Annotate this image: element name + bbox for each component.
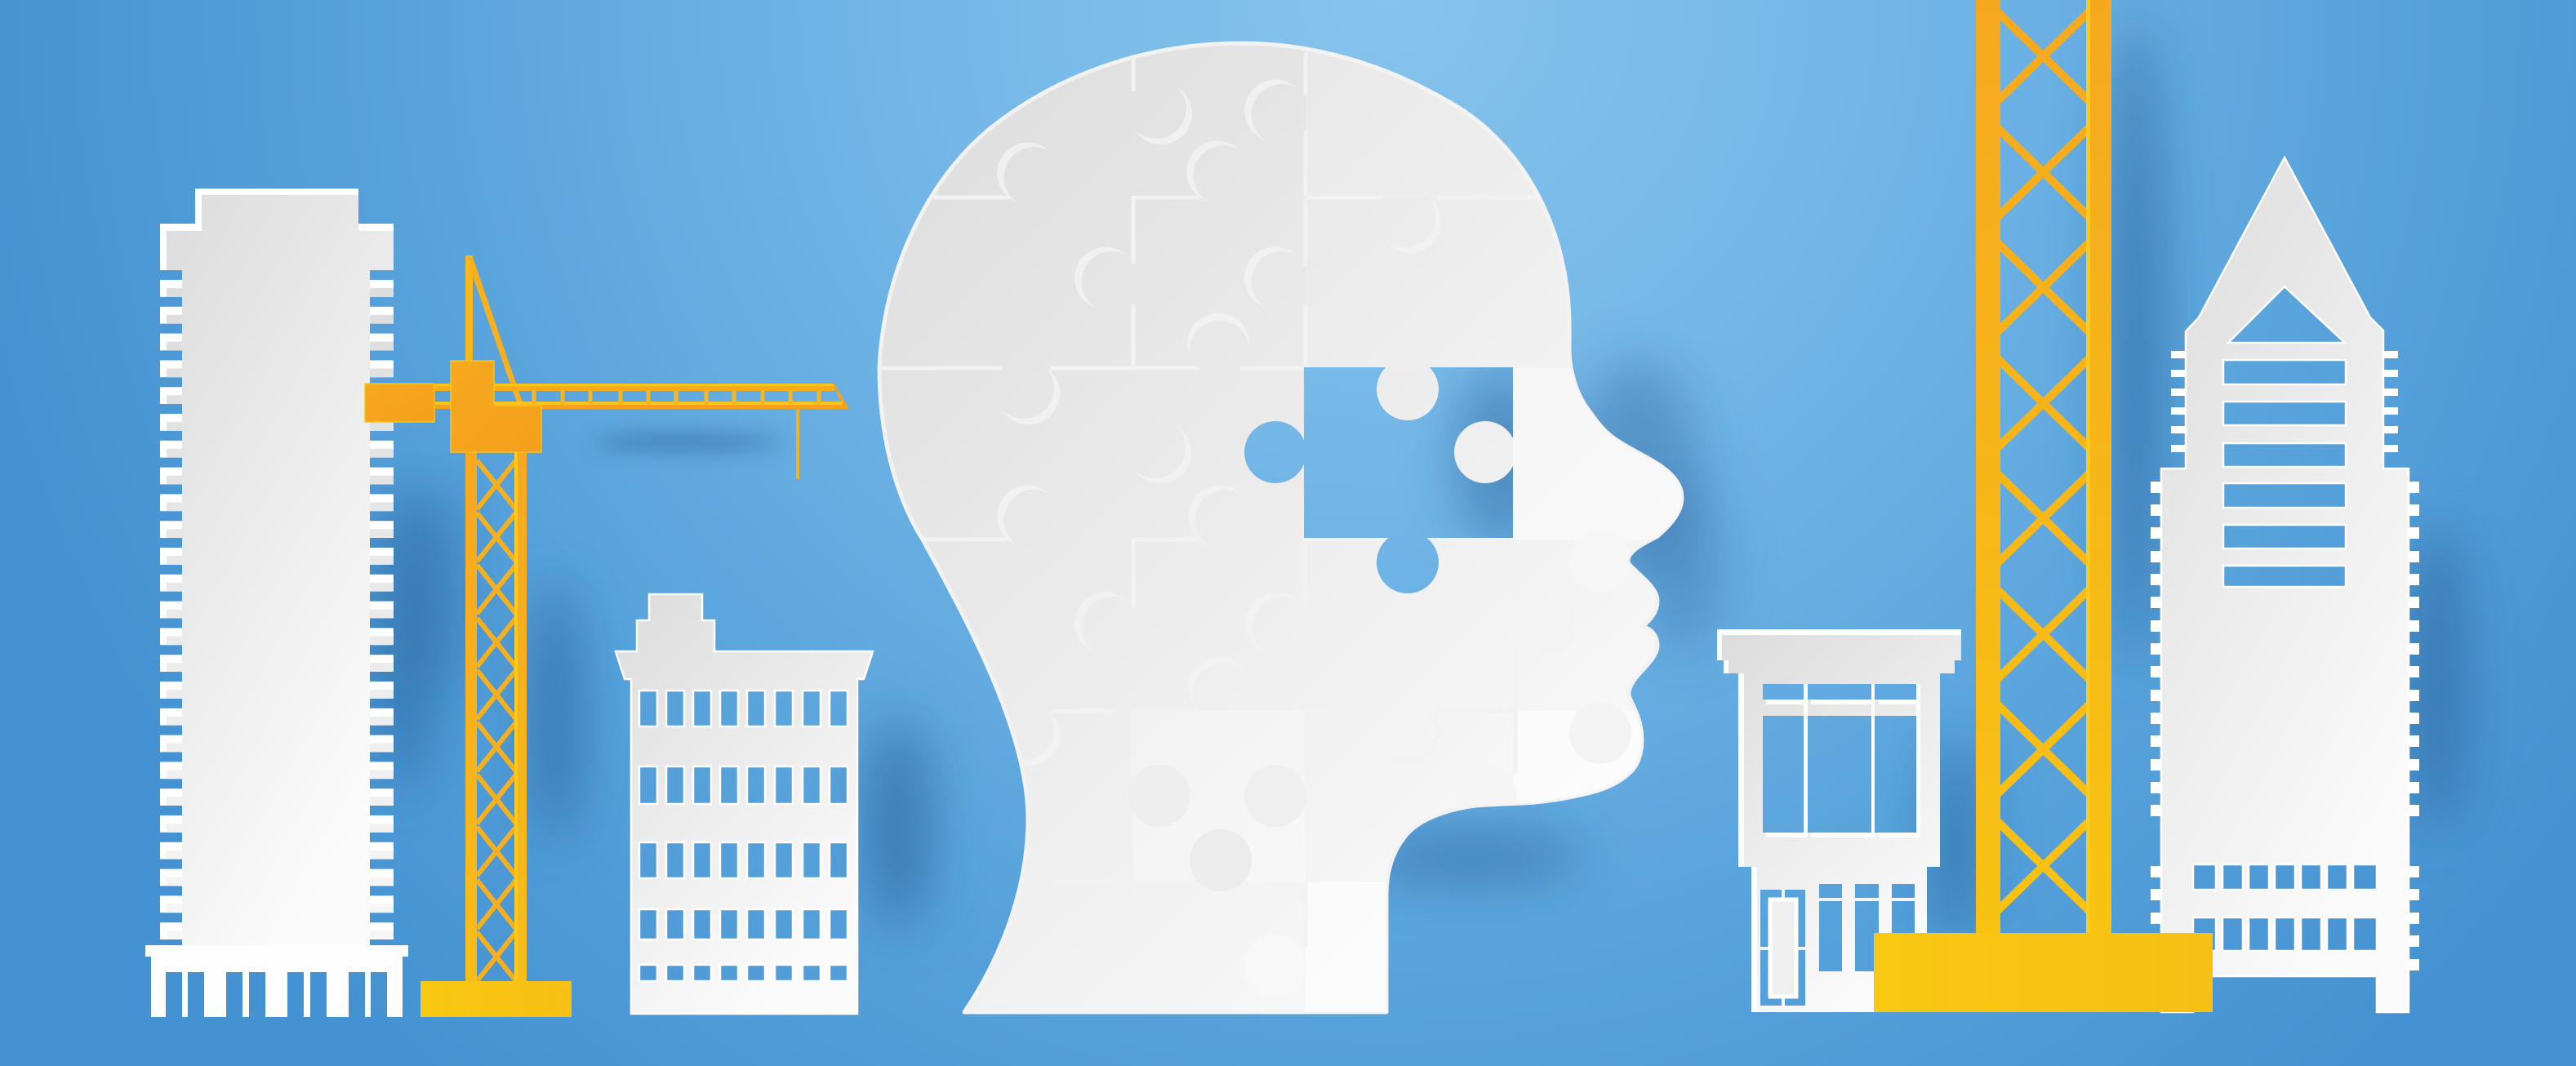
small building with door <box>1717 629 1961 1012</box>
head shape <box>879 43 1682 1012</box>
large crane legs <box>1976 0 2111 933</box>
large crane lattice <box>1996 11 2090 912</box>
lower balconies <box>2151 482 2419 971</box>
tower body <box>167 195 394 945</box>
crane mast lattice <box>477 460 516 981</box>
crane leg highlight <box>514 452 518 981</box>
crane stay cable <box>469 257 523 402</box>
door <box>1770 899 1796 997</box>
building rim <box>1717 629 1961 1012</box>
tower balcony shade right <box>370 270 394 945</box>
puzzle tabs filled <box>1190 712 1631 882</box>
crane hook line <box>796 409 799 479</box>
crane base <box>420 981 572 1017</box>
tower base with columns <box>145 945 408 1017</box>
crane cab <box>451 361 541 452</box>
tower balcony shade left <box>167 288 182 939</box>
window sills <box>1766 684 1920 837</box>
office building small <box>616 594 873 1014</box>
crane left <box>365 255 849 1017</box>
upper balconies <box>2171 351 2398 452</box>
right skyscraper <box>2151 158 2419 1012</box>
large crane foreground <box>1874 0 2213 1012</box>
building body with windows <box>1722 635 1961 1012</box>
lighter puzzle pieces <box>1133 33 1693 1013</box>
large crane base <box>1874 933 2213 1012</box>
crane jib truss <box>434 384 849 409</box>
puzzle seam lines <box>881 53 1536 947</box>
tower rim <box>160 189 394 945</box>
tower balconies left <box>160 270 183 945</box>
paper cut drop shadows <box>371 16 2467 947</box>
crane jib shadow <box>594 433 781 451</box>
puzzle head silhouette <box>879 33 1693 1013</box>
tower building left <box>145 189 408 1017</box>
puzzle tabs crescents <box>985 69 1589 997</box>
crane mast legs <box>465 452 527 981</box>
office body with windows <box>616 594 873 1014</box>
tower balconies right <box>370 270 394 945</box>
large crane leg highlight <box>2086 0 2090 933</box>
skyscraper body with windows <box>2161 158 2409 1012</box>
crane counterweight <box>365 384 434 422</box>
crane mast head <box>465 255 473 362</box>
